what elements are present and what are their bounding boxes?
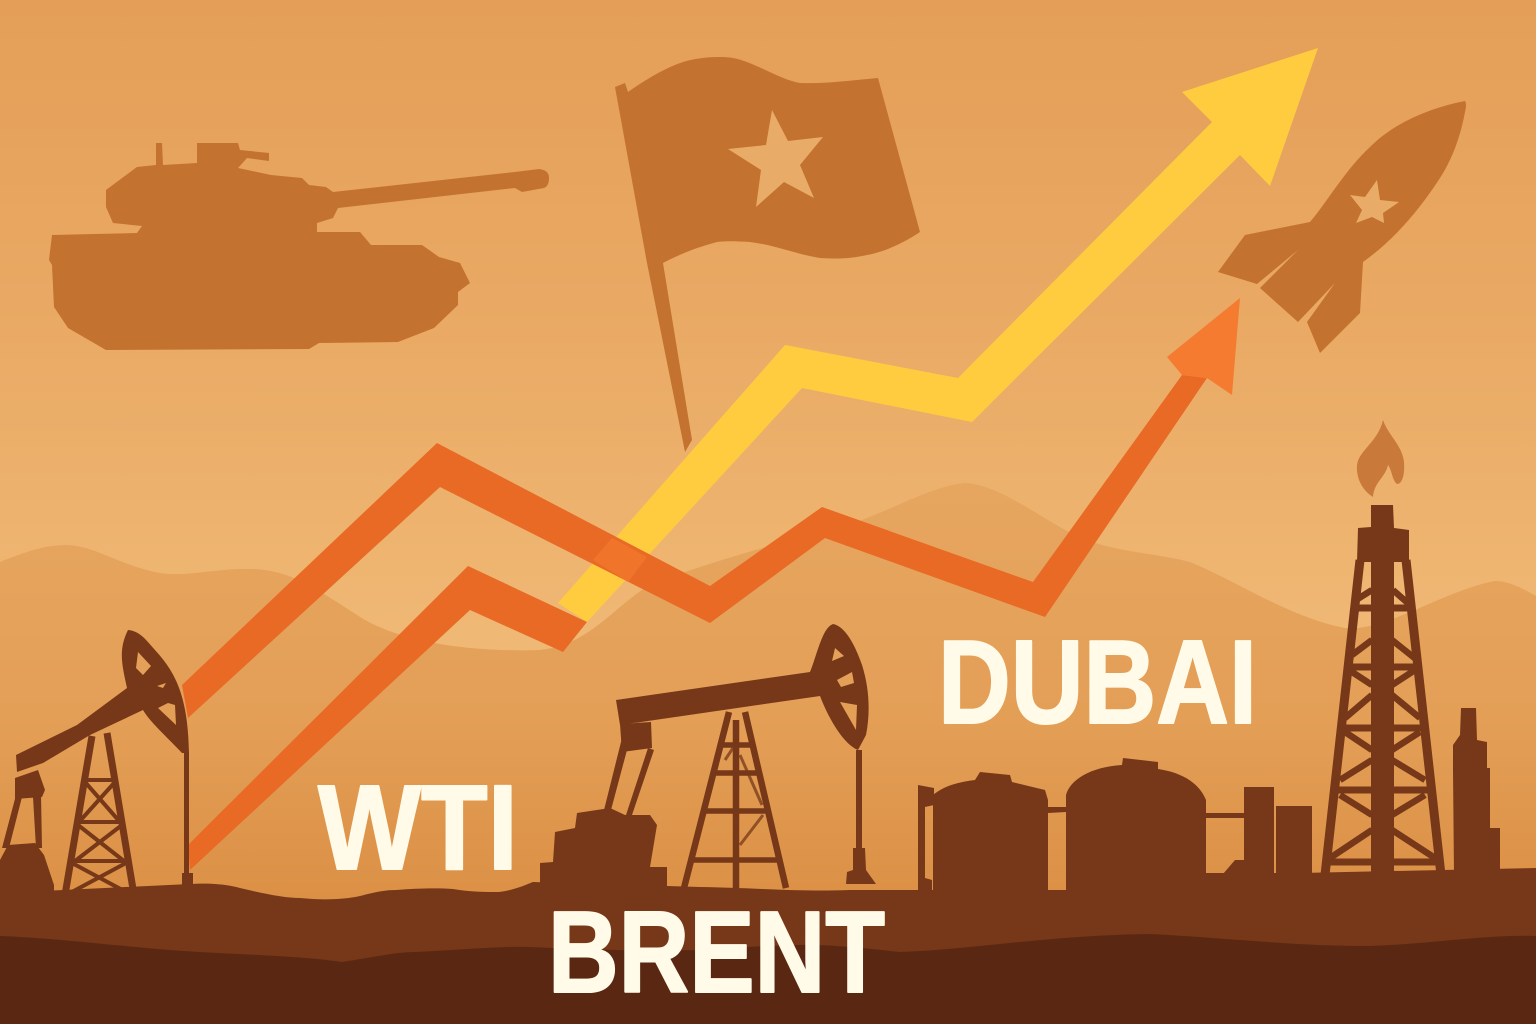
flame (1357, 420, 1404, 497)
ground (0, 868, 1536, 1024)
pump jack left (0, 630, 193, 895)
lower dark ground band (0, 934, 1536, 1024)
desert mountains (0, 483, 1536, 900)
pump jack centre (540, 624, 876, 895)
icon: tank (49, 143, 549, 350)
oil field silhouette (0, 505, 1536, 1024)
label: BRENT: BRENT (548, 887, 885, 1017)
icon: rocket (1218, 101, 1466, 353)
chart line: lower orange price line (188, 566, 587, 870)
label: DUBAI: DUBAI (938, 616, 1257, 749)
chart arrow: upper orange price line (182, 298, 1240, 718)
storage tanks and pipes (918, 758, 1312, 900)
chart arrow: yellow rising price line (558, 48, 1318, 622)
label: WTI: WTI (318, 759, 518, 895)
icon: flag with star (615, 57, 920, 452)
refinery chimney (1453, 708, 1500, 875)
oil derrick (1325, 505, 1441, 880)
